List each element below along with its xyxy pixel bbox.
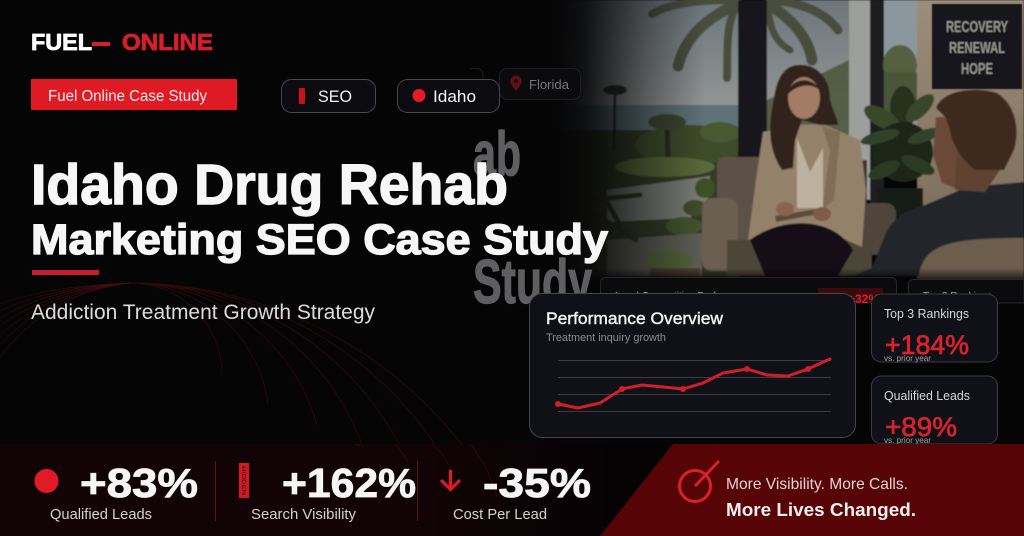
front chair [918, 238, 1024, 280]
sign board [932, 4, 1022, 89]
decorative arcs [0, 283, 497, 497]
man [853, 182, 1024, 276]
subtitle: Addiction Treatment Growth Strategy [31, 301, 375, 324]
stat: qualified leads: Qualified Leads [50, 506, 152, 523]
background cards behind overview [600, 278, 1024, 306]
window posts [738, 0, 767, 160]
stat: search visibility [239, 460, 416, 523]
card: top 3 rankings: vs. prior year [884, 353, 931, 363]
background cards behind overview: Top 3 Rankings [923, 291, 992, 302]
wall [917, 0, 1024, 280]
logo: ONLINE [122, 29, 213, 55]
tag: SEO: SEO [318, 87, 352, 106]
title [31, 153, 608, 264]
divider [417, 461, 418, 521]
stat: cost per lead [441, 460, 591, 523]
plant [859, 86, 942, 184]
card: qualified leads: vs. prior year [884, 435, 931, 445]
closing callout band [600, 444, 1024, 536]
stat: cost per lead: -35% [483, 460, 591, 506]
big palm fronds [652, 0, 838, 78]
small table plant [644, 250, 692, 270]
ghost text fragments: ab [473, 120, 521, 189]
panel: performance overview [530, 294, 856, 438]
line chart [555, 359, 831, 412]
far palms right [884, 0, 918, 110]
faded tag: Florida [470, 68, 580, 100]
card: qualified leads: +89% [885, 412, 957, 442]
icon: target with pointer [680, 461, 719, 502]
card: top 3 rankings [872, 294, 998, 363]
stat: search visibility: Search Visibility [251, 506, 356, 523]
card: top 3 rankings: +184% [885, 330, 969, 360]
tag: SEO [282, 80, 376, 112]
badge: Fuel Online Case Study [31, 79, 237, 110]
ghost text fragments: Study [473, 248, 592, 317]
title: Idaho Drug Rehab [31, 153, 508, 217]
ghost text fragments [473, 120, 592, 317]
callout text: More Visibility. More Calls. [726, 476, 908, 493]
woman [748, 124, 866, 247]
card: qualified leads [872, 376, 998, 445]
shore palm [667, 125, 668, 157]
title: Marketing SEO Case Study [31, 216, 608, 264]
photo: counselling session by a window [555, 0, 1024, 303]
stat: cost per lead: Cost Per Lead [453, 506, 547, 523]
tag: Idaho: Idaho [433, 87, 476, 106]
stat: qualified leads [34, 460, 198, 523]
card: top 3 rankings: Top 3 Rankings [884, 307, 969, 321]
sign board: HOPE [961, 61, 993, 78]
panel subheading: Treatment inquiry growth [546, 332, 666, 344]
stat: search visibility: +162% [282, 460, 416, 506]
stat: qualified leads: +83% [80, 460, 198, 506]
faded tag: Florida: Florida [529, 77, 570, 92]
distant palm [614, 90, 615, 150]
logo [31, 29, 213, 55]
closing callout band: More Lives Changed. [726, 500, 916, 520]
fern [590, 190, 640, 240]
pane greenery centre [767, 60, 849, 160]
badge: Fuel Online Case Study: Fuel Online Case Study [48, 88, 207, 105]
card: qualified leads: Qualified Leads [884, 389, 970, 403]
stat: search visibility: HIDDEN [240, 466, 246, 495]
logo: FUEL [31, 29, 92, 55]
divider [215, 461, 216, 521]
background cards behind overview: Local Competitive Performance [615, 291, 755, 302]
armchair [717, 157, 770, 240]
background cards behind overview: +32% [848, 292, 879, 306]
tag: Idaho [398, 80, 500, 112]
bottom stats strip [0, 444, 1024, 536]
panel heading: Performance Overview [546, 310, 723, 328]
title underline [32, 270, 99, 275]
